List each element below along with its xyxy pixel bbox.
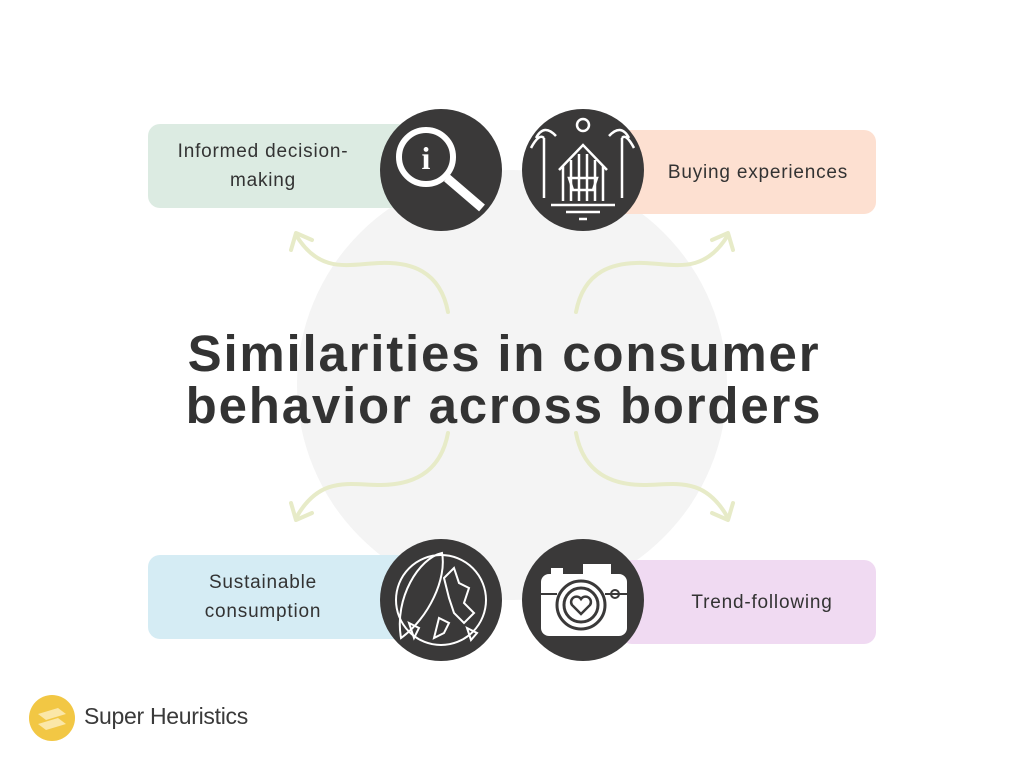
title [186,325,822,434]
arrow: top-right [576,233,733,312]
box: sustainable consumption: Sustainable [209,572,317,593]
icon: logo mark [29,695,75,741]
logo text: Super Heuristics [84,703,248,729]
box: informed decision-making: Informed decision- [178,141,348,162]
icon: magnifier info: i [422,140,431,176]
icon: beach hut [522,109,644,231]
title: Similarities in consumer [188,325,820,382]
title: behavior across borders [186,377,822,434]
icon: globe leaf [380,539,502,661]
box: informed decision-making: making [230,170,296,191]
arrow: top-left [291,233,448,312]
box: buying experiences [612,130,876,214]
box: trend-following: Trend-following [691,592,833,612]
box: buying experiences: Buying experiences [668,162,848,182]
background circle [297,170,727,600]
box: informed decision-making [148,124,410,208]
arrow: bottom-left [291,433,448,520]
box: sustainable consumption: consumption [205,601,321,622]
logo [29,695,248,741]
arrow: bottom-right [576,433,733,520]
box: sustainable consumption [148,555,410,639]
icon: camera heart [522,539,644,661]
icon: magnifier info [380,109,502,231]
box: trend-following [620,560,876,644]
